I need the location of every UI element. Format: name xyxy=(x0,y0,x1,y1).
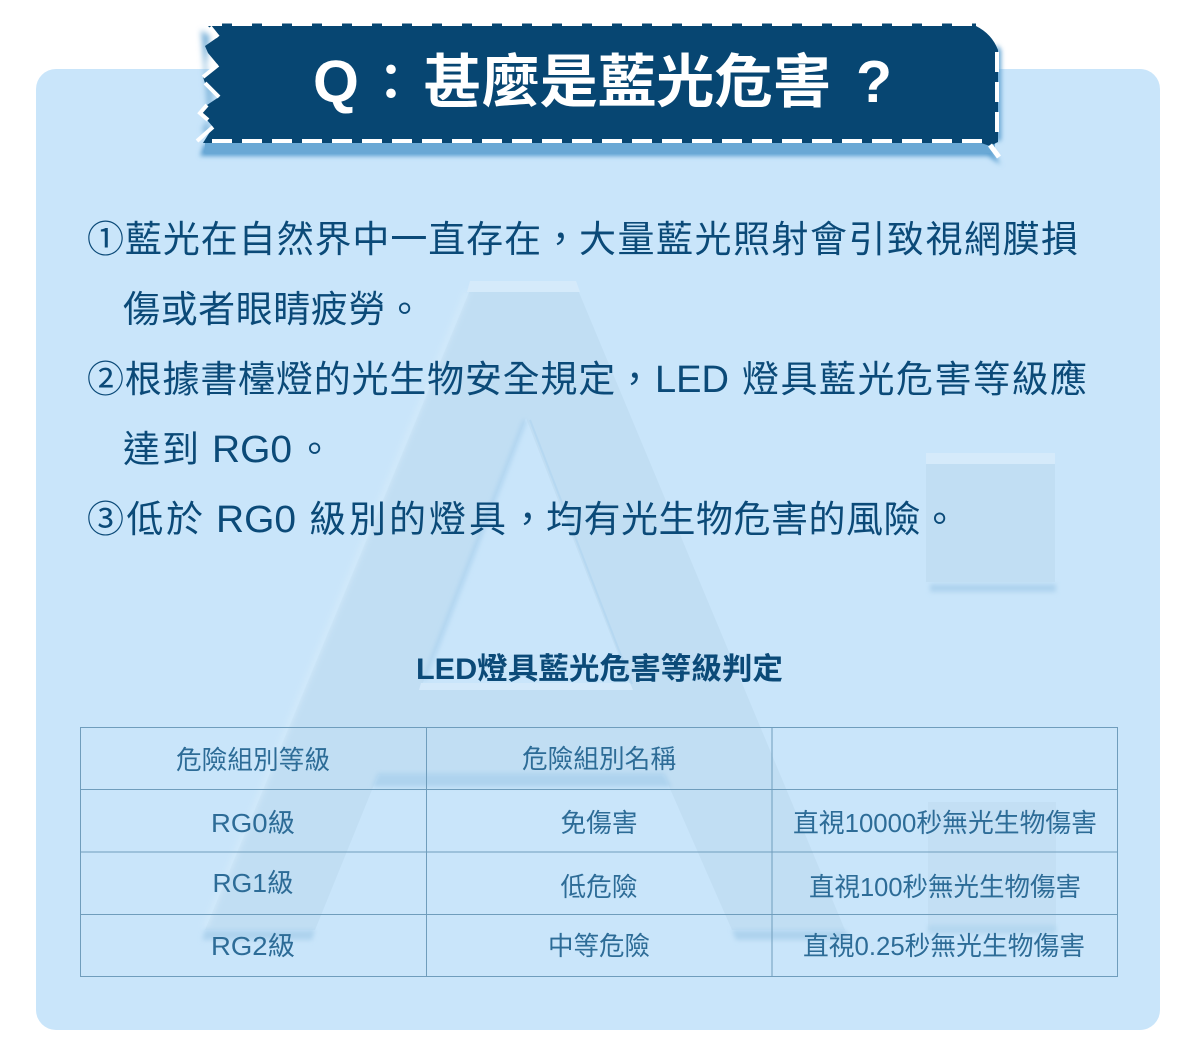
point 2: 燈具藍光危害等級應 xyxy=(742,359,1087,400)
banner left blur xyxy=(201,30,212,138)
point 1: ①藍光在自然界中一直存在， xyxy=(87,219,579,260)
title question mark: ? xyxy=(856,49,892,115)
point 2 xyxy=(87,359,1087,401)
banner top dashes xyxy=(222,24,976,26)
watermark: letter A and squares xyxy=(202,281,1056,940)
banner ribbon xyxy=(200,26,998,146)
table grid xyxy=(80,727,1118,977)
row RG1: 直視100秒無光生物傷害 xyxy=(809,872,1081,902)
title main words: 甚麼是藍光危害 xyxy=(423,50,831,115)
point 1 continued: 傷或者眼睛疲勞。 xyxy=(123,289,423,330)
point 2: ②根據書檯燈的光生物安全規定， xyxy=(87,359,653,400)
table header row: 危險組別名稱 xyxy=(522,744,676,774)
table header row xyxy=(176,744,676,775)
row RG1 xyxy=(212,868,1081,902)
text block: bullet points xyxy=(87,219,1087,541)
row RG2: RG2級 xyxy=(211,931,295,961)
row RG2: 直視0.25秒無光生物傷害 xyxy=(803,931,1085,961)
point 2 continued: 達到 xyxy=(123,429,199,470)
point 2 continued xyxy=(123,429,333,471)
banner shadow xyxy=(200,44,1001,166)
banner stitching xyxy=(197,27,999,157)
title letter Q: Q xyxy=(313,49,359,115)
point 1 xyxy=(87,219,1078,260)
point 3: RG0 xyxy=(216,499,296,541)
title colon: ： xyxy=(366,55,416,111)
banner bottom shadow band xyxy=(205,142,995,153)
table: hazard group ratings xyxy=(80,727,1118,977)
point 3 xyxy=(87,499,958,541)
banner title text xyxy=(313,49,892,115)
row RG2: 中等危險 xyxy=(548,931,650,961)
row RG1: 低危險 xyxy=(560,872,638,902)
table heading: LED燈具藍光危害等級判定 xyxy=(416,653,783,686)
row RG0: 免傷害 xyxy=(560,808,638,838)
table header row: 危險組別等級 xyxy=(176,745,330,775)
row RG2 xyxy=(211,931,1085,961)
point 2: LED xyxy=(655,359,729,401)
row RG1: RG1級 xyxy=(212,868,294,898)
point 2 continued: RG0 xyxy=(212,429,292,471)
row RG0 xyxy=(211,808,1097,838)
point 3: ③低於 xyxy=(87,499,203,540)
point 3: 級別的燈具， xyxy=(309,499,546,540)
title banner xyxy=(197,25,1001,166)
row RG0: 直視10000秒無光生物傷害 xyxy=(793,808,1097,838)
row RG0: RG0級 xyxy=(211,808,295,838)
point 2 continued: 。 xyxy=(296,429,333,470)
point 3: 均有光生物危害的風險。 xyxy=(546,499,958,540)
point 1: 大量藍光照射會引致視網膜損 xyxy=(579,219,1078,260)
